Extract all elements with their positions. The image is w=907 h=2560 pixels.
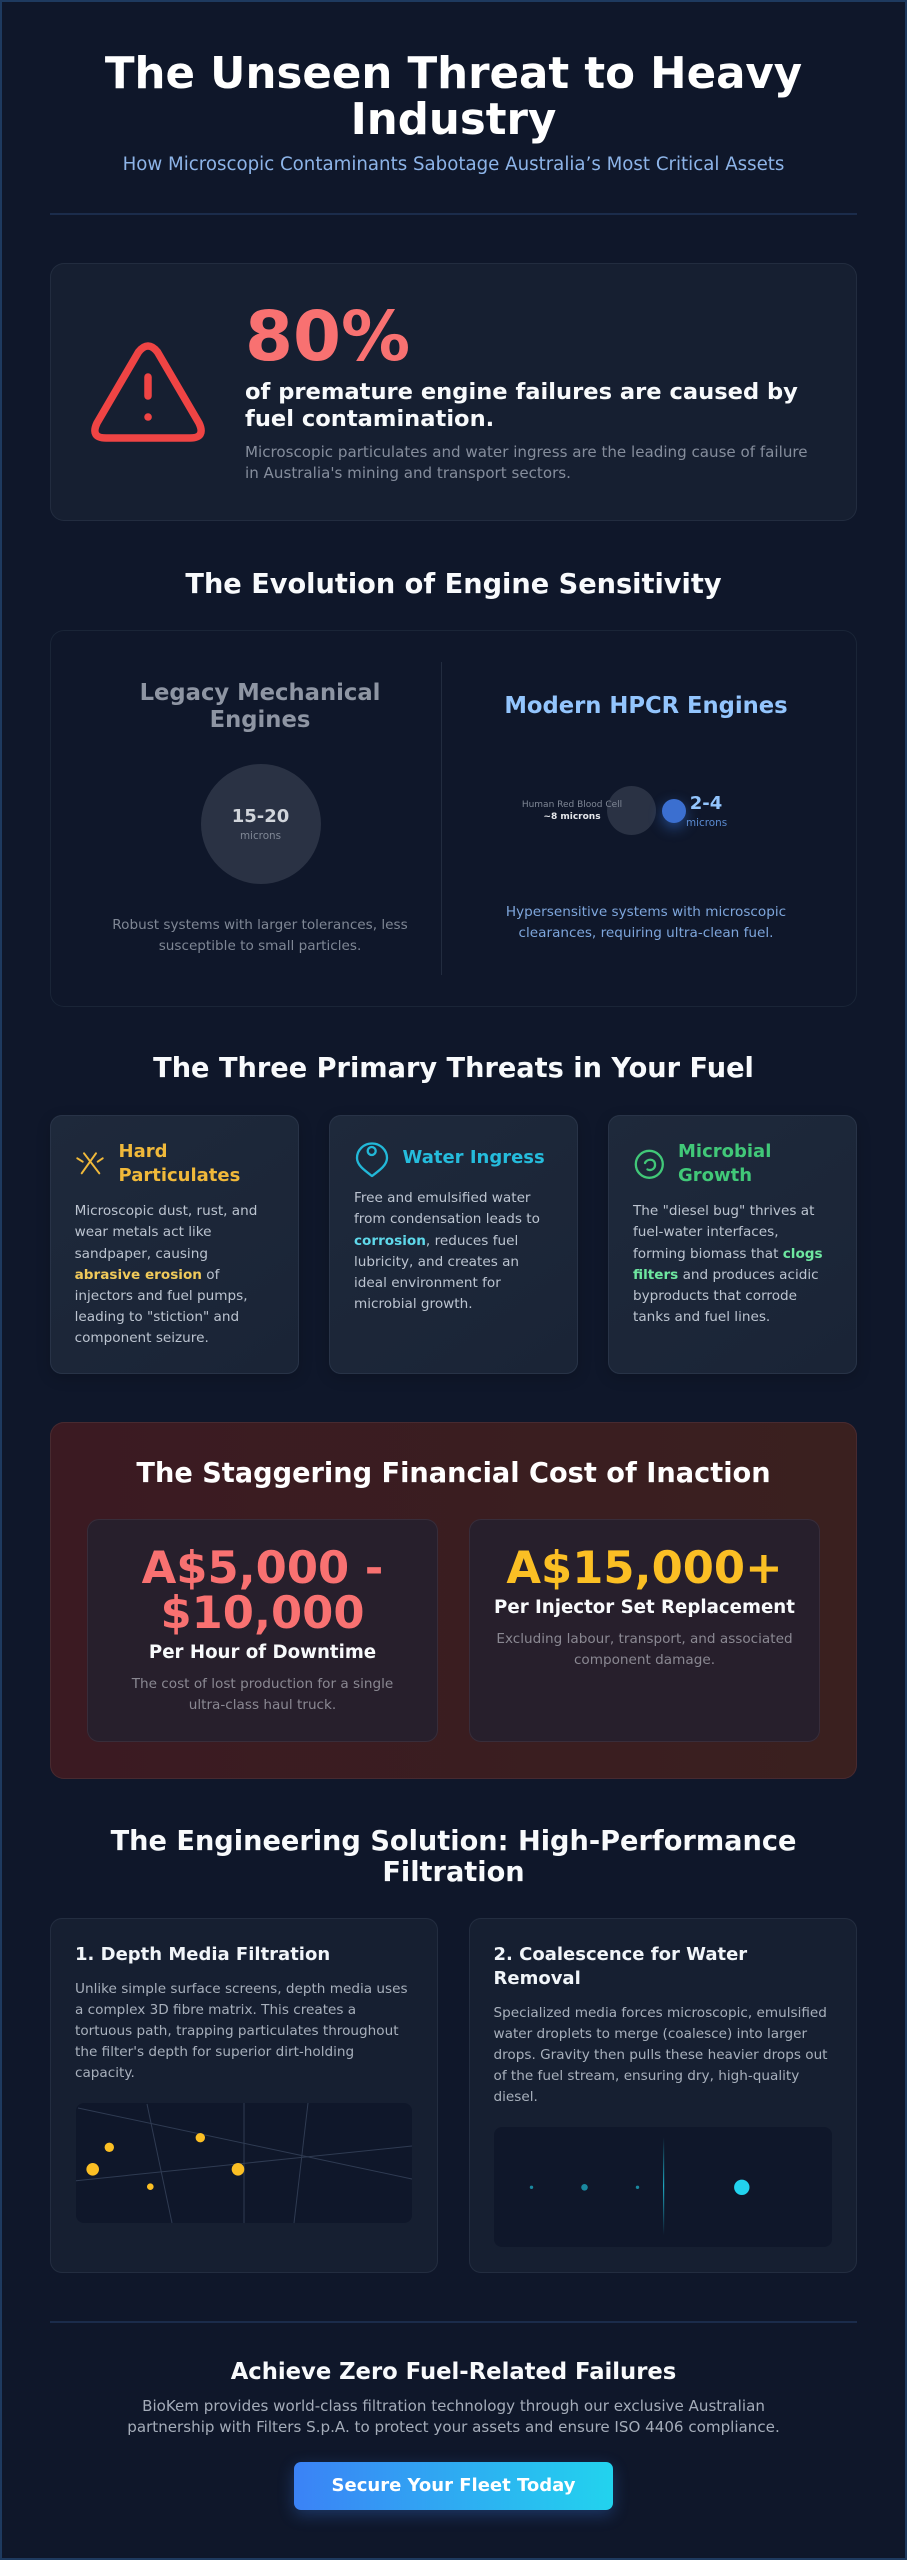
heading: engineering solution: The Engineering Solution: High-Performance [111, 1826, 796, 1857]
solution description: capacity. [75, 2065, 135, 2081]
red blood cell circle [607, 786, 656, 835]
red blood cell label: ~8 microns [543, 812, 601, 822]
solution heading: 2. Coalescence for Water [494, 1944, 747, 1965]
threat heading [118, 1141, 240, 1186]
injector cost description: component damage. [574, 1652, 715, 1668]
legacy engines heading: Legacy Mechanical [140, 680, 380, 706]
particle size comparison [522, 786, 727, 835]
red blood cell label: Human Red Blood Cell [522, 800, 622, 810]
solution description: water droplets to merge (coalesce) into larger [494, 2026, 807, 2042]
statistic headline [245, 379, 798, 432]
threat description: corrosion, reduces fuel [354, 1233, 518, 1249]
panel: 80% statistic [50, 263, 857, 521]
threat description: component seizure. [75, 1330, 209, 1346]
legacy engines heading [140, 680, 380, 733]
title: Industry [351, 95, 556, 145]
solution description [75, 1981, 408, 2081]
threat description: lubricity, and creates an [354, 1254, 519, 1270]
modern description: clearances, requiring ultra-clean fuel. [519, 925, 773, 941]
call to action text: partnership with Filters S.p.A. to protect your assets and ensure ISO 4406 compliance. [127, 2418, 780, 2436]
threat description: fuel-water interfaces, [633, 1224, 779, 1240]
diagram: droplets merging through media [494, 2127, 832, 2247]
call to action text [127, 2397, 780, 2436]
cost card: injector replacement [469, 1519, 820, 1742]
modern engines heading: Modern HPCR Engines [504, 693, 788, 719]
panel: engine comparison [50, 630, 857, 1007]
icon: particles [76, 1152, 104, 1174]
threat description: forming biomass that clogs [633, 1246, 823, 1262]
modern micron unit: microns [686, 817, 727, 829]
injector cost description: Excluding labour, transport, and associated [496, 1631, 793, 1647]
threat heading: Particulates [118, 1165, 240, 1186]
heading: three threats: The Three Primary Threats in Your Fuel [153, 1053, 754, 1084]
modern particle dot [662, 799, 686, 823]
threat description: sandpaper, causing [75, 1246, 208, 1262]
solution heading: 1. Depth Media Filtration [75, 1944, 330, 1965]
modern description: Hypersensitive systems with microscopic [506, 904, 786, 920]
threat description: The "diesel bug" thrives at [633, 1203, 814, 1219]
statistic description [245, 443, 808, 482]
modern description [506, 904, 786, 941]
solution description: drops. Gravity then pulls these heavier drops out [494, 2047, 828, 2063]
panel: coalescence [469, 1918, 857, 2273]
threat description: byproducts that corrode [633, 1288, 797, 1304]
solution description: Specialized media forces microscopic, emulsified [494, 2005, 827, 2021]
downtime cost description: The cost of lost production for a single [132, 1676, 393, 1692]
threat description [632, 1203, 823, 1325]
solution description [494, 2005, 828, 2105]
threat description: wear metals act like [75, 1224, 212, 1240]
statistic description: Microscopic particulates and water ingress are the leading cause of failure [245, 443, 808, 461]
button: secure your fleet [294, 2462, 613, 2510]
icon: water pin [356, 1142, 388, 1178]
legacy particle circle [200, 764, 320, 884]
statistic headline: fuel contamination. [245, 406, 494, 432]
threat description: abrasive erosion of [75, 1267, 219, 1283]
statistic description: in Australia's mining and transport sectors. [245, 464, 571, 482]
legacy micron unit: microns [240, 830, 281, 842]
title [105, 48, 802, 145]
heading: engine sensitivity: The Evolution of Engine Sensitivity [185, 569, 722, 600]
downtime cost figure: A$5,000 - [142, 1541, 383, 1594]
heading: engineering solution [110, 1826, 796, 1888]
threat description [354, 1190, 540, 1312]
solution description: Unlike simple surface screens, depth media uses [75, 1981, 408, 1997]
downtime cost figure: $10,000 [160, 1586, 365, 1639]
panel: hard particulates [50, 1115, 299, 1374]
threat description: filters and produces acidic [633, 1267, 819, 1283]
downtime cost label: Per Hour of Downtime [149, 1642, 376, 1663]
red blood cell label [522, 800, 622, 822]
injector cost label: Per Injector Set Replacement [494, 1597, 795, 1618]
downtime cost figure [142, 1541, 383, 1639]
threat description: leading to "stiction" and [75, 1309, 239, 1325]
injector cost figure: A$15,000+ [506, 1541, 783, 1594]
modern micron value: 2-4 [690, 793, 722, 814]
call to action heading: Achieve Zero Fuel-Related Failures [231, 2359, 676, 2385]
panel: microbial growth [608, 1115, 857, 1374]
threat description: Free and emulsified water [354, 1190, 531, 1206]
injector cost description [496, 1631, 793, 1668]
legacy engines heading: Engines [210, 707, 310, 733]
diagram: fibre matrix with trapped particles [76, 2103, 412, 2223]
solution description: the filter's depth for superior dirt-holding [75, 2044, 354, 2060]
big number 80%: 80% [245, 297, 410, 377]
solution description: a complex 3D fibre matrix. This creates a [75, 2002, 356, 2018]
solution description: of the fuel stream, ensuring dry, high-quality [494, 2068, 799, 2084]
threat description: ideal environment for [354, 1275, 501, 1291]
threat description: microbial growth. [354, 1296, 473, 1312]
legacy description: susceptible to small particles. [159, 938, 361, 954]
threat heading: Hard [118, 1141, 167, 1162]
legacy description [112, 917, 408, 954]
statistic headline: of premature engine failures are caused by [245, 379, 798, 405]
solution heading [494, 1944, 748, 1989]
threat description: injectors and fuel pumps, [75, 1288, 248, 1304]
downtime cost description [132, 1676, 393, 1713]
panel: water ingress [329, 1115, 578, 1374]
threat heading: Water Ingress [402, 1147, 545, 1168]
panel: depth media filtration [50, 1918, 438, 2273]
icon: warning triangle [91, 342, 205, 442]
call to action text: BioKem provides world-class filtration technology through our exclusive Australian [142, 2397, 765, 2415]
solution description: tortuous path, trapping particulates throughout [75, 2023, 399, 2039]
legacy micron value: 15-20 [232, 806, 289, 827]
threat heading: Growth [678, 1165, 752, 1186]
subtitle: How Microscopic Contaminants Sabotage Australia’s Most Critical Assets [123, 154, 784, 175]
panel: financial cost [50, 1422, 857, 1779]
threat description: from condensation leads to [354, 1211, 540, 1227]
threat description [75, 1203, 257, 1346]
threat heading: Microbial [678, 1141, 771, 1162]
icon: microbe [634, 1150, 664, 1179]
downtime cost description: ultra-class haul truck. [189, 1697, 336, 1713]
cost card: downtime [87, 1519, 438, 1742]
threat heading [678, 1141, 771, 1186]
heading: engineering solution: Filtration [382, 1857, 525, 1888]
solution description: diesel. [494, 2089, 538, 2105]
threat description: tanks and fuel lines. [633, 1309, 770, 1325]
financial heading: The Staggering Financial Cost of Inaction [136, 1458, 771, 1489]
threat description: Microscopic dust, rust, and [75, 1203, 257, 1219]
legacy description: Robust systems with larger tolerances, less [112, 917, 408, 933]
button label: Secure Your Fleet Today [332, 2475, 575, 2496]
solution heading: Removal [494, 1968, 581, 1989]
title: The Unseen Threat to Heavy [105, 48, 802, 98]
